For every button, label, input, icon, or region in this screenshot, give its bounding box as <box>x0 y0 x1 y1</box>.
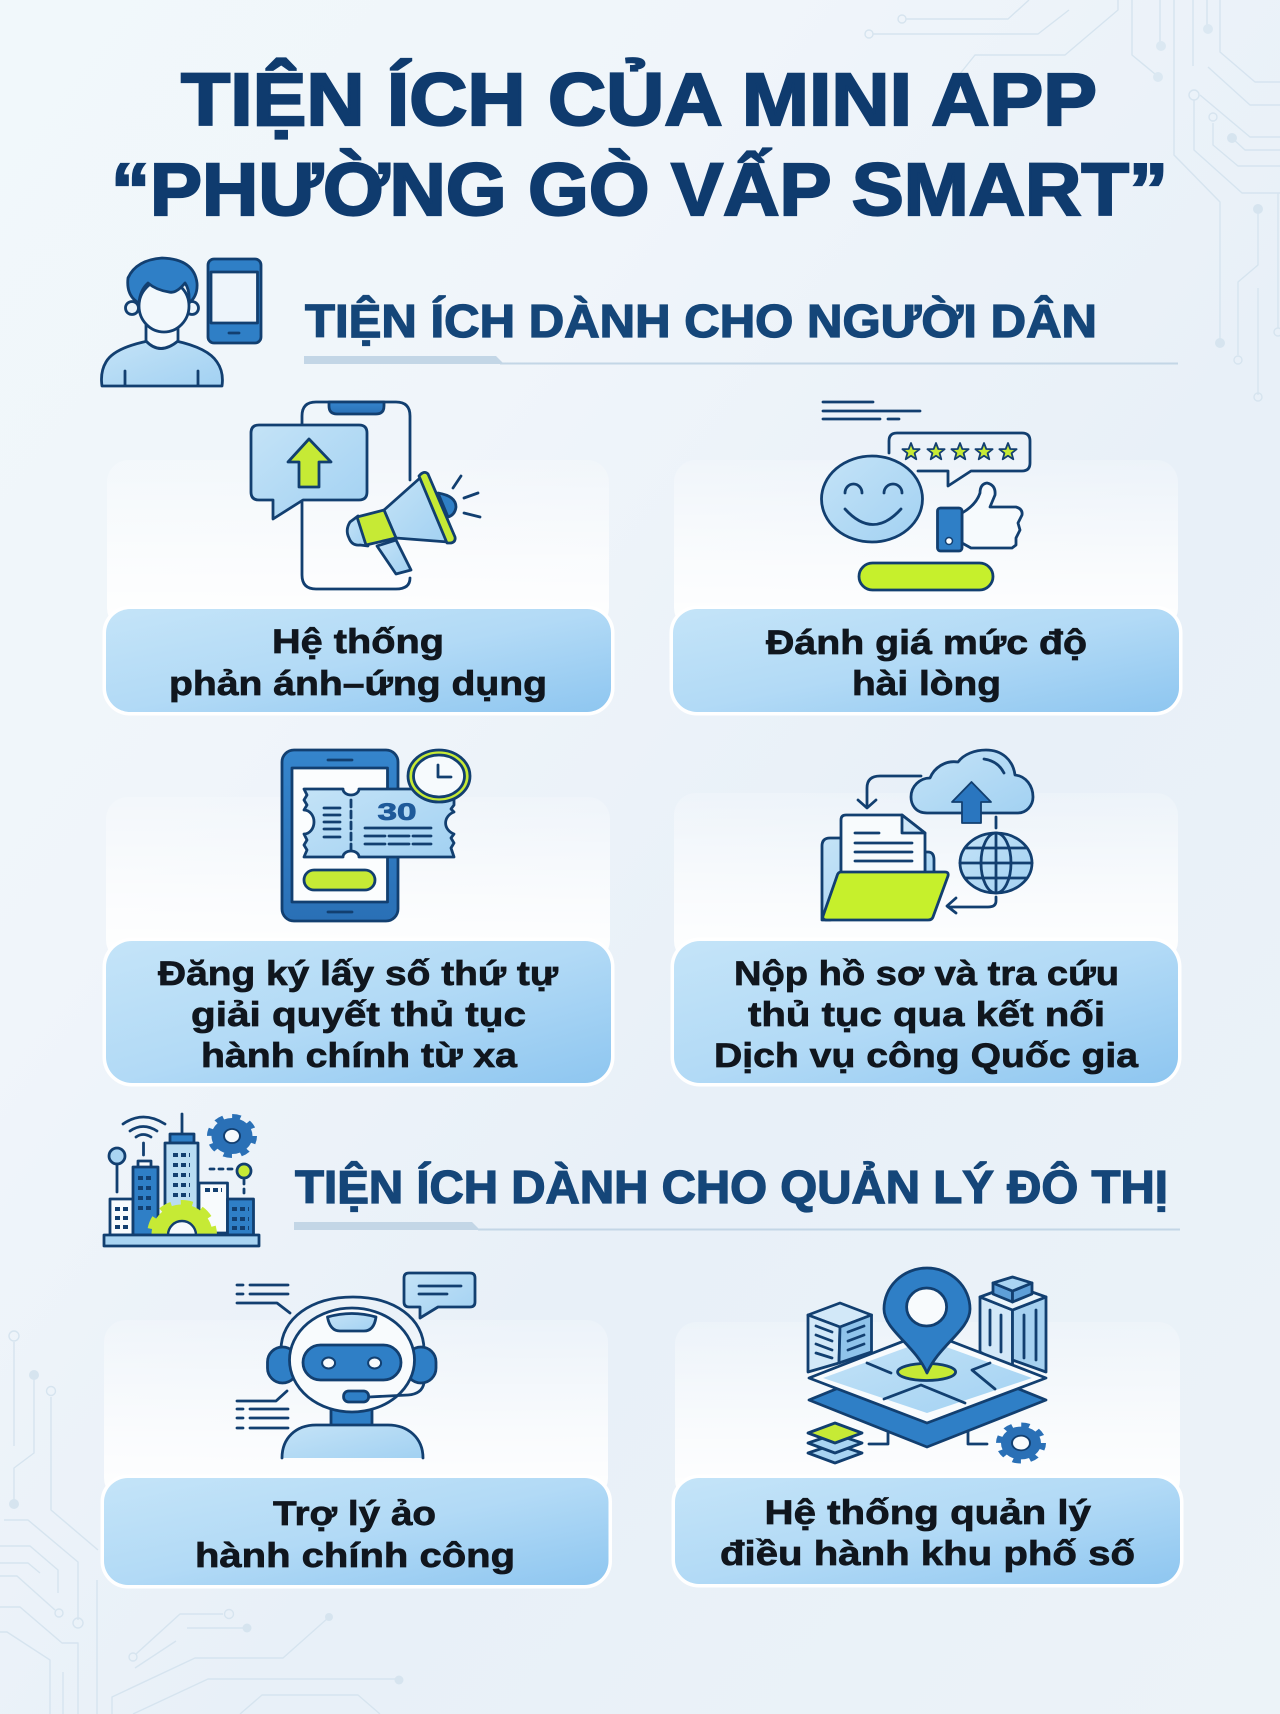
panel: digital neighbourhood management <box>675 1268 1180 1584</box>
icon: phone with ticket and clock <box>282 750 470 921</box>
label: virtual assistant <box>104 1478 608 1585</box>
label: satisfaction rating: Đánh giá mức độ <box>766 624 1087 662</box>
label: feedback system: phản ánh–ứng dụng <box>169 665 547 703</box>
label: dossier submission: Dịch vụ công Quốc gia <box>714 1037 1139 1075</box>
label: queue number registration: hành chính từ xa <box>201 1037 518 1075</box>
circuit pattern: top right <box>865 0 1280 401</box>
label: satisfaction rating: hài lòng <box>852 665 1001 703</box>
label: digital neighbourhood management: điều hành khu phố số <box>720 1535 1135 1573</box>
label: feedback system: Hệ thống <box>272 623 444 661</box>
label: dossier submission <box>674 941 1178 1083</box>
heading: citizen services <box>304 295 1178 364</box>
panel: virtual assistant <box>104 1273 608 1585</box>
label: queue number registration <box>106 941 611 1083</box>
icon: robot assistant <box>237 1273 475 1458</box>
icon: map with location pin <box>808 1268 1046 1463</box>
label: virtual assistant: Trợ lý ảo <box>273 1495 436 1533</box>
icon: phone with megaphone <box>251 402 480 589</box>
label: dossier submission: Nộp hồ sơ và tra cứu <box>734 955 1119 993</box>
icon: phone with ticket and clock: 30 <box>378 799 416 826</box>
label: feedback system <box>106 609 611 712</box>
label: dossier submission: thủ tục qua kết nối <box>748 996 1105 1034</box>
icon: smart city <box>104 1114 259 1265</box>
heading: citizen services: TIỆN ÍCH DÀNH CHO NGƯỜI DÂN <box>305 295 1097 347</box>
label: digital neighbourhood management <box>675 1478 1180 1584</box>
panel: queue number registration <box>106 750 611 1083</box>
title: “PHƯỜNG GÒ VẤP SMART” <box>111 148 1168 231</box>
label: virtual assistant: hành chính công <box>195 1537 515 1575</box>
panel: dossier submission <box>674 750 1178 1083</box>
panel: feedback system <box>106 402 611 712</box>
label: queue number registration: giải quyết thủ tục <box>191 996 526 1034</box>
title: TIỆN ÍCH CỦA MINI APP <box>181 58 1097 141</box>
circuit pattern: bottom left <box>0 1331 404 1714</box>
panel: satisfaction rating <box>673 402 1179 712</box>
heading: urban management: TIỆN ÍCH DÀNH CHO QUẢN LÝ ĐÔ THỊ <box>295 1161 1168 1213</box>
icon: smiley, stars and thumbs up <box>822 402 1030 590</box>
label: queue number registration: Đăng ký lấy số thứ tự <box>158 955 558 993</box>
icon: folder, cloud and globe <box>822 750 1033 920</box>
title <box>111 58 1168 231</box>
label: satisfaction rating <box>673 609 1179 712</box>
icon: citizen with phone <box>102 258 261 386</box>
label: digital neighbourhood management: Hệ thống quản lý <box>764 1494 1091 1532</box>
